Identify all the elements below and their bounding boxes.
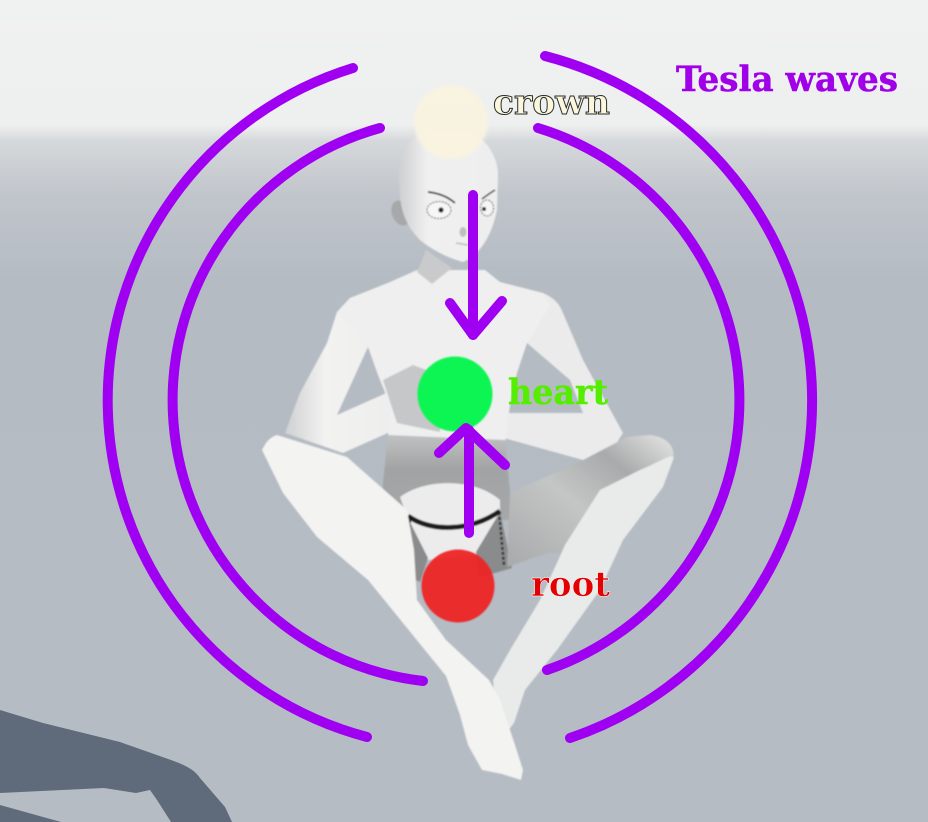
heart chakra glow [418,356,492,432]
arrow: down from crown to heart [450,195,502,335]
figure: torso [337,270,550,443]
label: Tesla waves: Tesla waves [676,59,898,100]
outer left arc [108,68,367,737]
root chakra glow [422,550,494,622]
outer right arc [545,56,812,738]
seated figure [262,130,674,780]
figure: waistband [408,511,500,527]
figure: neck shade [417,250,452,284]
figure: abdomen [383,435,512,520]
Tesla wave arcs [108,56,812,738]
crown chakra glow [414,85,488,159]
label: root: root [531,564,610,605]
label: crown: crown [493,82,610,123]
inner left arc [173,128,423,681]
figure: face details [427,190,495,245]
label: heart: heart [508,372,608,413]
figure: groin shading [398,512,512,582]
inner right arc [538,128,739,670]
figure: right arm [500,285,623,460]
figure: praying hands [383,365,440,432]
figure: pelvis [400,483,500,560]
figure: underwear straps [404,512,504,565]
floor shadow [0,710,232,822]
figure: left arm [285,282,420,453]
arrow: up from root to heart [439,428,505,533]
figure: right thigh [507,435,674,567]
figure: left leg [262,435,523,780]
figure: ear [388,198,414,228]
figure: right shin [493,456,673,735]
figure: head [398,130,498,262]
